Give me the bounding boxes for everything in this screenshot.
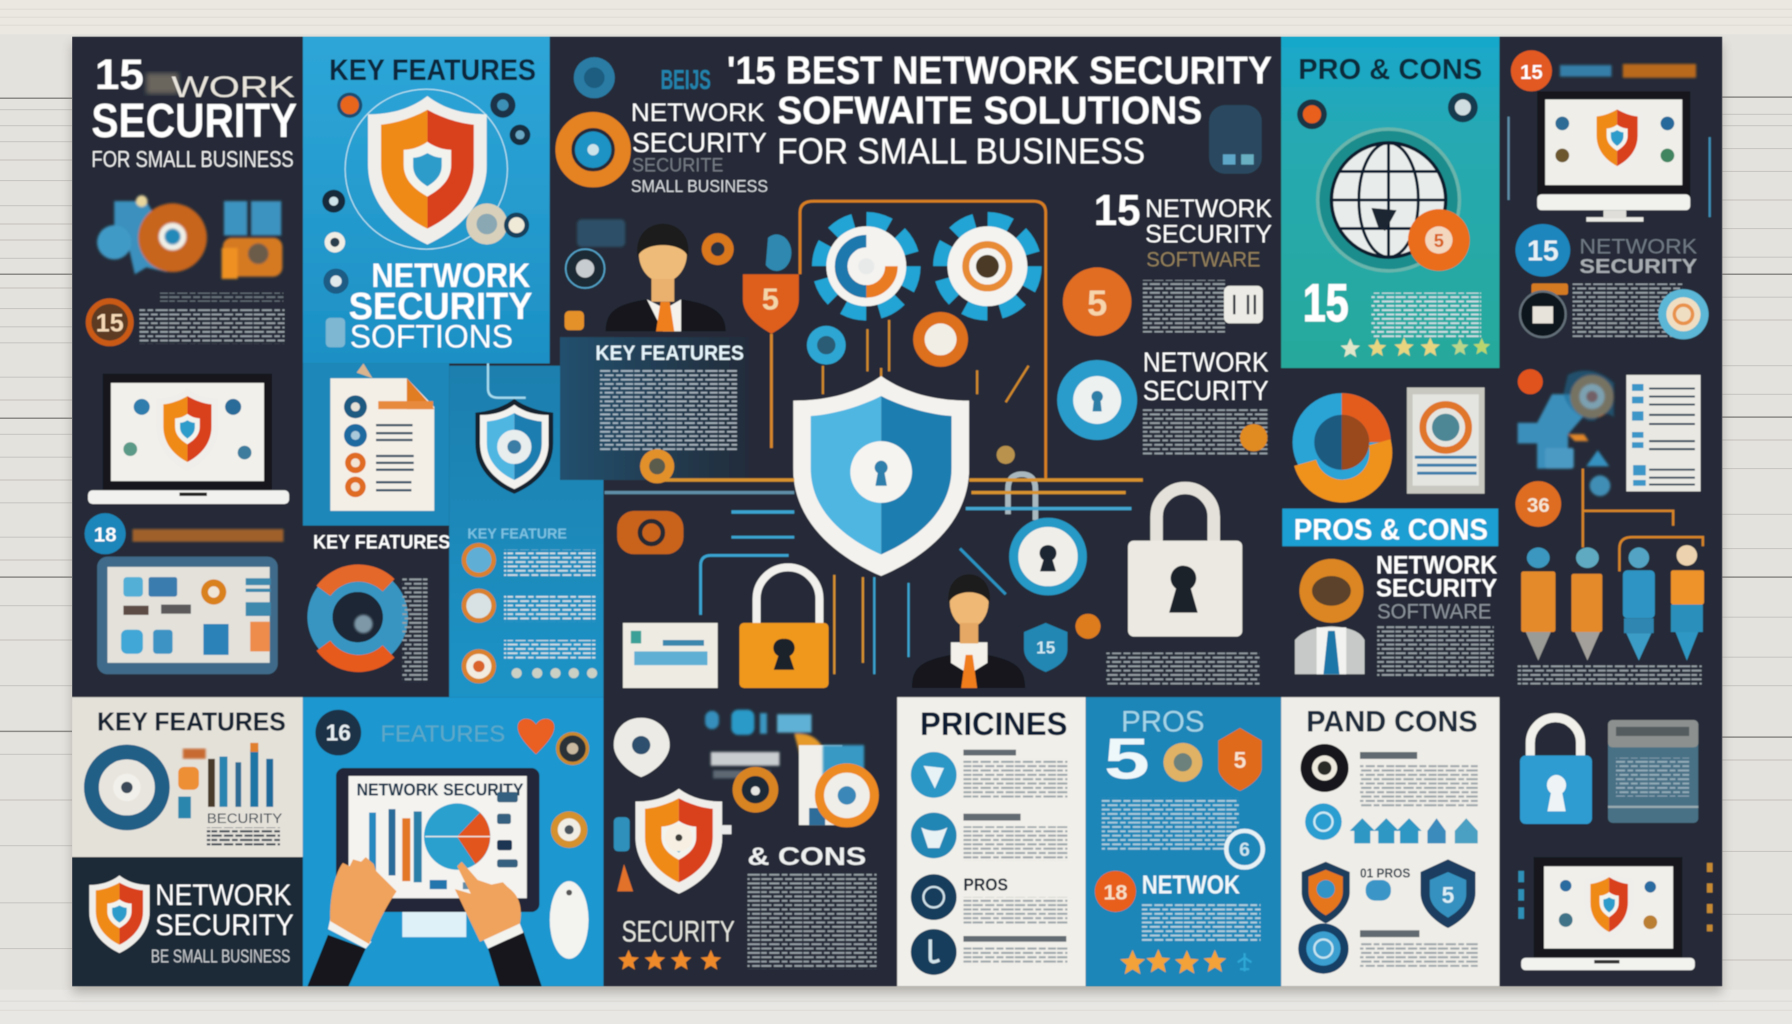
doc and orange circle (799, 745, 879, 827)
lock ring icon (1014, 522, 1082, 591)
side connectors (1508, 117, 1510, 200)
orange circuit frame (800, 201, 1046, 480)
badge: 16 (315, 710, 361, 755)
pie chart (1304, 405, 1381, 491)
heading: network security solutions: SOFTIONS (350, 318, 513, 354)
document list (1626, 375, 1701, 491)
heading: network security: NETWORK (1143, 346, 1269, 377)
small circuit nodes (807, 312, 1035, 520)
heading: 15 network security software: NETWORK (1145, 195, 1272, 223)
circuit traces (605, 480, 1143, 674)
tablet with app tiles (97, 557, 278, 674)
heading: key feature: KEY FEATURE (467, 526, 567, 542)
gold circle (1163, 743, 1202, 782)
big 15: 15 (1303, 274, 1349, 333)
central shield (793, 376, 969, 576)
heading: key features: KEY FEATURES (313, 532, 450, 554)
heading: network security small business: BE SMALL BUSINESS (151, 945, 290, 966)
side icons (614, 817, 731, 891)
blue circle icon (1305, 803, 1342, 840)
ring icon (1298, 923, 1349, 974)
white padlock (1128, 488, 1242, 637)
tablet (336, 768, 539, 912)
top-left logo: BEIJS (661, 64, 711, 95)
big 5: 5 (1104, 727, 1150, 791)
orange vertical link (770, 334, 773, 448)
white square icon (1224, 286, 1263, 323)
orange globe badge: 5 (1434, 230, 1444, 251)
heading: pros: PROS (1121, 705, 1205, 738)
orange padlock (739, 567, 829, 688)
centre small icon: 01 PROS (1360, 867, 1410, 881)
small icons (322, 93, 530, 347)
text block (747, 873, 877, 969)
panel: right column dark (1509, 50, 1710, 685)
orange text line (133, 529, 283, 542)
shield dark blue (1421, 859, 1475, 928)
heading: 15 network security software (1094, 187, 1272, 271)
badge: 18: 18 (1103, 879, 1127, 904)
orange shield: 5 (743, 274, 799, 334)
blue lock circle (1057, 360, 1137, 440)
panel: pand cons cream (1281, 697, 1499, 986)
tablet stand (402, 912, 466, 937)
small icons (1297, 93, 1478, 129)
panel: laptop and tablet (85, 374, 289, 674)
small blue icons (705, 710, 827, 778)
heading: network security software (1376, 552, 1497, 623)
badge orange ring (551, 811, 587, 848)
badge small (558, 734, 587, 763)
heading: pricines: PRICINES (920, 706, 1067, 742)
text block (1143, 409, 1269, 455)
feature rows (462, 543, 595, 683)
stars (618, 950, 721, 970)
ring icon: 6 (1239, 839, 1250, 861)
orange shield: 5: 5 (762, 282, 779, 317)
orange gear (733, 767, 778, 813)
panel: document on blue (303, 363, 449, 526)
text block (139, 293, 285, 344)
heading: network security small business (151, 879, 294, 966)
heading: network security small business: NETWORK (155, 879, 292, 912)
orange dot icon (1240, 424, 1267, 451)
row two (911, 813, 1067, 861)
heading: network security grey (1579, 234, 1698, 278)
icon cluster (97, 195, 282, 279)
tablet pie (424, 803, 490, 870)
text block top (1360, 752, 1478, 808)
text block bottom (1360, 930, 1478, 967)
small items (178, 749, 206, 818)
globe (1318, 129, 1459, 271)
badge: 16: 16 (326, 720, 351, 746)
swirl circle (1658, 289, 1709, 339)
blue padlock (1520, 718, 1592, 824)
small icons upper left (565, 219, 625, 330)
heading: network security software: NETWORK (1376, 552, 1497, 580)
small icon right of title (1209, 105, 1262, 174)
dark ring icon (1301, 744, 1349, 792)
stars (1120, 949, 1251, 974)
blue puzzle cluster (1518, 371, 1614, 496)
panel: network security dark (72, 857, 303, 986)
heading: 15 network security software: 15 (1094, 187, 1141, 235)
panel: shield list blue (449, 363, 603, 697)
orange badge: 5: 5 (1087, 282, 1107, 323)
panel: title left (86, 51, 297, 346)
star row (1341, 337, 1490, 357)
heading: 15 network security: WORK (171, 71, 295, 104)
white shield badge (614, 718, 670, 777)
badge: orange small (1518, 369, 1543, 394)
heading: key features: KEY FEATURES (329, 54, 536, 87)
shield with ring (345, 89, 507, 249)
badge: 18 (1095, 871, 1136, 912)
badge: 15 blue: 15 (1527, 236, 1559, 268)
heading: network security grey: SECURITY (1579, 255, 1697, 278)
heading: 15 network security: SECURITY (91, 95, 297, 148)
panel: lock and laptop dark (1520, 718, 1710, 970)
text block (1377, 624, 1494, 677)
lock icon (1520, 283, 1568, 337)
text block (1573, 283, 1682, 337)
text block (1371, 293, 1481, 338)
pin columns (1521, 545, 1704, 661)
heading: pand cons: PAND CONS (1306, 705, 1478, 738)
heading: network security grey: NETWORK (1579, 234, 1698, 259)
left connector (1519, 871, 1524, 920)
faded label: FEATURES (381, 721, 505, 747)
top-left logo (574, 57, 711, 98)
heading: 15 network security: 15 (95, 51, 144, 98)
panel: pie and pros cons dark (1282, 387, 1498, 677)
heading: security: SECURITY (622, 916, 735, 949)
heading: 15 network security software: SOFTWARE (1146, 246, 1261, 271)
shield dark blue: 5 (1442, 882, 1455, 908)
tablet bars (369, 809, 422, 882)
dark shield (475, 399, 553, 494)
mouse (550, 881, 589, 959)
orange node (640, 449, 674, 483)
tablet title: NETWORK SECURITY (357, 779, 524, 799)
heading: network security small business: SECURITY (155, 909, 294, 942)
heading: key features: KEY FEATURES (97, 706, 286, 736)
ring icon (1226, 831, 1263, 867)
heading: network security software: SOFTWARE (1377, 598, 1491, 623)
laptop (1521, 857, 1695, 970)
shield (89, 875, 150, 953)
panel: tablet on blue (303, 697, 603, 986)
gears (821, 221, 1033, 312)
heading: network security solutions: SECURITY (349, 285, 533, 327)
main title: '15 BEST NETWORK SECURITY (727, 49, 1272, 92)
side connector right (1709, 137, 1711, 217)
row three (911, 874, 1067, 925)
badge: 15: 15 (1520, 61, 1543, 84)
row three: PROS (963, 874, 1008, 894)
heading: & cons: & CONS (747, 843, 866, 871)
heading: 15 network security (91, 51, 297, 172)
main title: SOFWAITE SOLUTIONS (777, 89, 1202, 132)
badge: 15 (86, 298, 134, 346)
panel card (623, 623, 718, 688)
panel: pricines cream (897, 697, 1086, 986)
grey data panel (1608, 720, 1698, 823)
heading: network security solutions (349, 257, 533, 354)
text block (1518, 665, 1702, 685)
text block (1143, 280, 1225, 333)
person lower (912, 574, 1025, 688)
orange blob icon (617, 511, 683, 554)
heading: netwok: NETWOK (1142, 870, 1240, 900)
key features box (560, 337, 749, 480)
main title (727, 49, 1272, 171)
badge: 36 (1515, 481, 1561, 527)
donut chart (320, 573, 395, 664)
sub heading: network security (631, 99, 768, 196)
text block (1102, 798, 1239, 850)
heading: 15 network security software: SECURITY (1145, 220, 1272, 248)
panel: pro and cons teal (1281, 37, 1499, 368)
connectors (1583, 469, 1703, 571)
bar chart (208, 743, 273, 807)
shield badge small (1024, 623, 1067, 672)
orange globe badge (1408, 209, 1470, 271)
document checklist (330, 363, 434, 511)
panel: key features dark strip (303, 526, 450, 697)
coloured label line (1560, 64, 1696, 78)
orange shield: 5 (1234, 747, 1247, 773)
panel: central hub (560, 49, 1272, 688)
hands (307, 857, 542, 986)
sub heading: network security: SECURITE (632, 154, 723, 176)
chart label: BECURITY (207, 811, 282, 826)
panel: shield and cons dark (614, 710, 879, 970)
ring chart (91, 752, 162, 823)
shield badge small: 15 (1036, 638, 1056, 658)
heading: network security software: SECURITY (1376, 575, 1497, 603)
orange gear and blue badge (702, 233, 791, 271)
key features box: KEY FEATURES (595, 340, 744, 365)
shield orange small (1302, 862, 1350, 923)
badge: 18: 18 (94, 524, 117, 547)
badge: 15: 15 (96, 309, 124, 337)
laptop (88, 374, 289, 504)
orange dot (1075, 614, 1101, 639)
main title: FOR SMALL BUSINESS (777, 130, 1145, 171)
tablet legend (430, 792, 518, 889)
row one (911, 750, 1067, 798)
text block (1142, 903, 1261, 942)
blue circuit line (488, 363, 526, 398)
panel: pros blue (1086, 697, 1281, 986)
person with orange ring (1295, 559, 1365, 674)
sub heading: network security: SMALL BUSINESS (631, 176, 768, 196)
heading: network security solutions: NETWORK (371, 257, 531, 295)
orange shield (1218, 728, 1262, 791)
blue arrows (1350, 818, 1478, 843)
heading: pro & cons: PRO & CONS (1298, 54, 1482, 86)
chart labels (402, 577, 427, 682)
badge: 15 blue (1515, 224, 1570, 277)
banner: pros & cons: PROS & CONS (1294, 513, 1488, 546)
panel: key features blue (303, 37, 550, 363)
right connector (1707, 863, 1712, 931)
badge: 15 (1511, 50, 1552, 91)
badge: 18 (85, 513, 126, 554)
sub heading: network security: NETWORK (631, 99, 765, 127)
heading: network security (1143, 346, 1269, 406)
person (606, 224, 726, 331)
orange badge: 5 (1063, 267, 1131, 336)
panel: key features cream (72, 697, 303, 857)
centre small icon (1360, 867, 1410, 901)
orange shield (635, 789, 722, 894)
row four (911, 929, 1067, 975)
text block lower right (1106, 653, 1259, 685)
heading: network security: SECURITY (1143, 375, 1269, 406)
badge: 36: 36 (1527, 494, 1550, 517)
heart (518, 719, 554, 754)
monitor (1537, 91, 1690, 222)
orange ring icon (563, 120, 623, 179)
text block (207, 827, 280, 846)
heading: 15 network security: FOR SMALL BUSINESS (91, 146, 294, 172)
sub heading: network security: SECURITY (632, 127, 767, 158)
document with target (1407, 387, 1485, 494)
